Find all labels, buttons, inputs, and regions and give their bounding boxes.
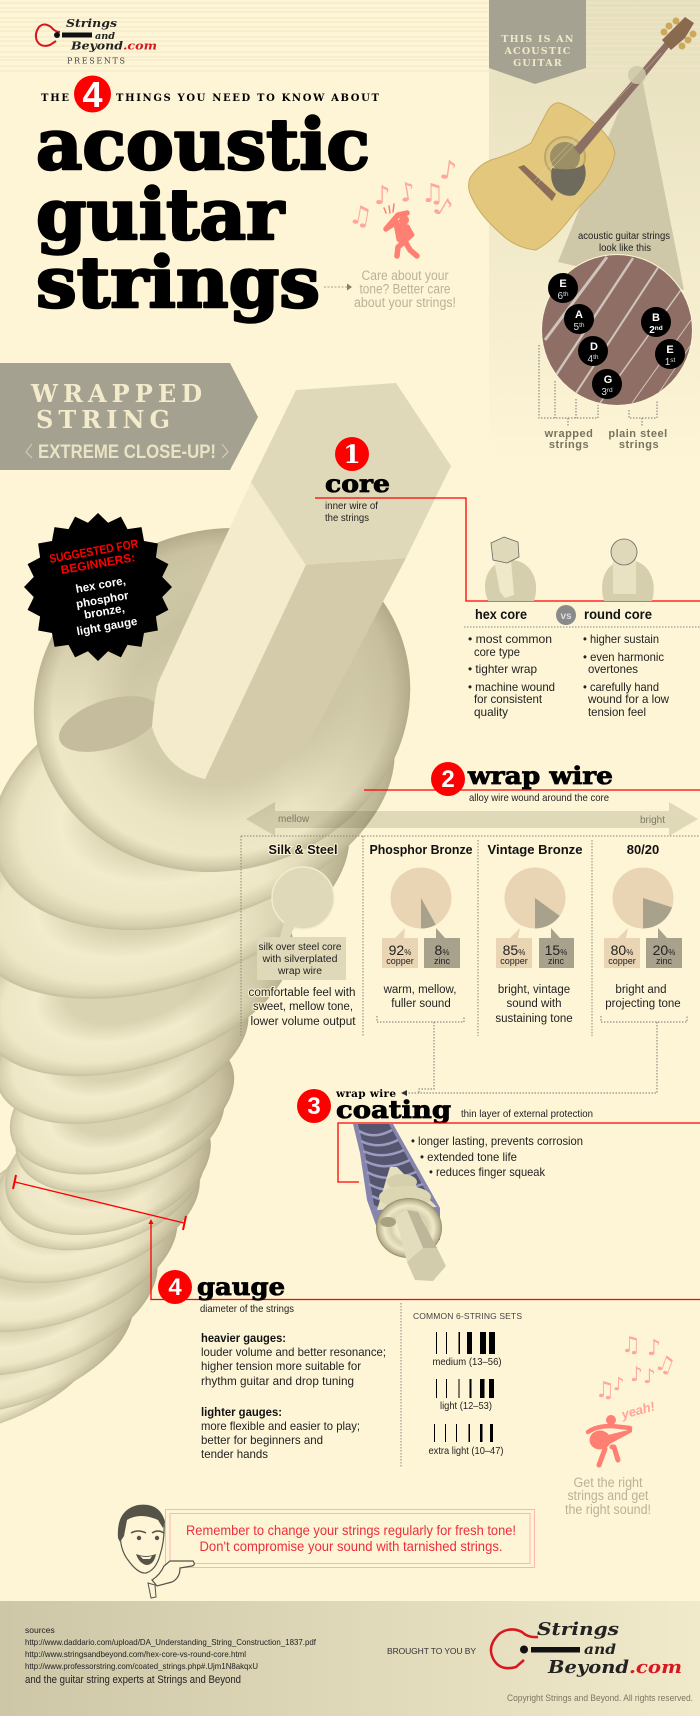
list: coating benefits: • extended tone life [420, 1150, 517, 1164]
subtitle: the 4 things you need to know about: THE [41, 93, 69, 104]
column: phosphor bronze: Phosphor Bronze [370, 842, 472, 857]
list: round core benefits: wound for a low [587, 692, 669, 706]
banner: wrapped string extreme close-up: STRING [36, 405, 170, 434]
comparison header: hex core vs round core: hex core [475, 607, 527, 622]
caption: get the right strings: the right sound! [565, 1502, 651, 1517]
section 3 heading: coating: thin layer of external protection [461, 1108, 593, 1120]
caption: care about your tone: Care about your [362, 268, 449, 283]
close-up circle of guitar strings: E [559, 278, 567, 290]
banner: wrapped string extreme close-up [0, 363, 258, 470]
close-up circle of guitar strings: A [575, 309, 583, 321]
section 2 heading: wrap wire: 2 [441, 766, 455, 793]
footer: sources: sources [25, 1625, 55, 1635]
list: coating benefits: • reduces finger squeak [429, 1165, 546, 1179]
icon: acoustic guitar [469, 17, 696, 250]
chart: common 6-string sets: medium (13–56) [432, 1356, 502, 1368]
label: wrapped strings: strings [549, 439, 589, 451]
icon: music notes around listener: ♫ [346, 200, 375, 233]
icon: music notes around guitarist: ♪ [647, 1336, 661, 1361]
close-up circle of guitar strings: D [590, 341, 598, 353]
footer logo: Strings and Beyond [491, 1619, 682, 1678]
caption: get the right strings: strings and get [568, 1488, 649, 1503]
section 3 heading: coating [297, 1088, 593, 1124]
close-up circle of guitar strings: 6 [558, 291, 563, 302]
title: acoustic guitar strings: guitar [36, 173, 285, 256]
column: phosphor bronze: copper [386, 956, 414, 966]
section 4 heading: gauge: diameter of the strings [200, 1303, 294, 1315]
connectors: wrap wire to coating [377, 1016, 687, 1096]
label: plain steel strings: strings [619, 439, 659, 451]
close-up circle of guitar strings: 3 [601, 387, 607, 398]
icon: music notes around listener: ♪ [397, 177, 418, 209]
column: silk and steel: wrap wire [277, 966, 322, 977]
callout: remember to change your strings: Remember to change your strings regularly for fresh tone! [186, 1522, 516, 1538]
footer logo: Strings and Beyond: Strings [537, 1619, 619, 1640]
column: vintage bronze: bright, vintage [498, 984, 570, 996]
badge: suggested for beginners: light gauge [76, 616, 138, 638]
label: plain steel strings [608, 428, 668, 451]
column: silk and steel: Silk & Steel [268, 842, 338, 857]
caption: care about your tone: tone? Better care [360, 282, 450, 296]
icon: music notes around listener: ♪ [374, 181, 391, 211]
icon: music notes around guitarist: ♫ [621, 1333, 641, 1358]
section 1 heading: core: 1 [343, 440, 361, 469]
close-up circle of guitar strings: nd [655, 325, 663, 332]
banner: this is an acoustic guitar: GUITAR [513, 58, 563, 69]
icon: music notes around listener: ♪ [428, 191, 457, 225]
column: 80/20: 80/20 [627, 842, 659, 857]
title: acoustic guitar strings: strings [36, 241, 320, 324]
list: round core benefits [583, 632, 669, 719]
footer logo: Strings and Beyond: Beyond [547, 1657, 629, 1678]
footer logo: Strings and Beyond: and [584, 1642, 616, 1658]
label: wrapped strings: wrapped [544, 428, 593, 440]
label: plain steel strings: plain steel [608, 428, 668, 440]
column: 80/20: projecting tone [605, 998, 681, 1010]
text: heavier gauges [201, 1331, 386, 1388]
column: vintage bronze: zinc [548, 956, 564, 966]
section 1 heading: core: inner wire of [325, 501, 378, 512]
badge: suggested for beginners: hex core, [75, 575, 127, 596]
label: wrapped strings [544, 428, 593, 451]
section 1 heading: core: core [325, 469, 390, 498]
illustration: round core [602, 539, 654, 601]
caption: get the right strings [565, 1475, 651, 1517]
text: heavier gauges: heavier gauges: [201, 1331, 286, 1345]
brackets: wrapped and plain strings [539, 345, 657, 426]
column: phosphor bronze [370, 842, 472, 1010]
list: coating benefits: • longer lasting, prevents corrosion [411, 1134, 583, 1148]
column: vintage bronze: sustaining tone [495, 1013, 573, 1025]
arrow: to caption [324, 284, 352, 290]
footer: sources: and the guitar string experts at Strings and Beyond [25, 1674, 241, 1686]
banner: this is an acoustic guitar: THIS IS AN [501, 34, 575, 45]
caption: get the right strings: Get the right [574, 1475, 643, 1490]
section 4 heading: gauge: gauge [197, 1272, 285, 1301]
close-up circle of guitar strings: th [579, 322, 585, 329]
badge: suggested for beginners: SUGGESTED FOR [48, 536, 140, 566]
icon: guitarist saying yeah [588, 1398, 657, 1465]
footer: sources [25, 1625, 317, 1686]
column: silk and steel: comfortable feel with [248, 987, 356, 999]
column: vintage bronze: copper [500, 956, 528, 966]
title: acoustic guitar strings [36, 103, 370, 324]
section 1 heading: core: the strings [325, 513, 369, 524]
subtitle: the 4 things you need to know about: 4 [82, 74, 103, 115]
list: coating benefits [411, 1134, 583, 1179]
text: lighter gauges: better for beginners and [201, 1433, 323, 1447]
icon: music notes around guitarist: ♫ [651, 1350, 678, 1380]
column: 80/20: 20% [653, 942, 675, 958]
list: hex core benefits: • most common [468, 632, 552, 646]
section 3 heading: coating: 3 [307, 1093, 321, 1120]
footer band [0, 1601, 700, 1716]
column: vintage bronze [488, 842, 582, 1025]
subtitle: the 4 things you need to know about: THINGS YOU NEED TO KNOW ABOUT [116, 93, 380, 104]
list: hex core benefits: core type [474, 645, 520, 659]
badge: suggested for beginners: BEGINNERS: [60, 550, 136, 577]
chart: common 6-string sets [413, 1311, 522, 1457]
close-up circle of guitar strings: acoustic guitar strings [578, 230, 670, 242]
section 3 heading: coating: wrap wire [335, 1088, 396, 1100]
close-up circle of guitar strings: 5 [574, 322, 579, 333]
callout: remember to change your strings: Don't compromise your sound with tarnished strings. [200, 1538, 502, 1554]
close-up circle of guitar strings: rd [607, 387, 613, 394]
column: silk and steel: silk over steel core [258, 942, 342, 953]
badge: suggested for beginners [24, 513, 172, 661]
text: lighter gauges: lighter gauges: [201, 1405, 282, 1419]
icon: music notes around guitarist: ♪ [613, 1374, 624, 1395]
badge: suggested for beginners: phosphor [75, 590, 130, 611]
section 4 heading: gauge [148, 1219, 700, 1315]
logo: Strings and Beyond: PRESENTS [67, 56, 125, 66]
column: phosphor bronze: zinc [434, 956, 450, 966]
column: vintage bronze: 85% [503, 942, 525, 958]
text: heavier gauges: higher tension more suitable for [201, 1359, 361, 1373]
banner: this is an acoustic guitar: ACOUSTIC [503, 46, 572, 57]
list: round core benefits: • even harmonic [583, 650, 664, 664]
close-up circle of guitar strings: th [563, 291, 569, 298]
close-up circle of guitar strings: 2 [649, 325, 655, 336]
chart: common 6-string sets: light (12–53) [440, 1400, 492, 1412]
icon: person holding head [384, 204, 417, 256]
close-up circle of guitar strings: E [666, 344, 674, 356]
list: round core benefits: • carefully hand [583, 680, 659, 694]
chart: common 6-string sets: extra light (10–47) [428, 1445, 504, 1457]
close-up circle of guitar strings [541, 230, 694, 406]
list: round core benefits: tension feel [588, 705, 646, 719]
icon: guitarist saying yeah: yeah! [619, 1398, 657, 1422]
wound string coils [0, 480, 455, 1466]
icon: music notes around listener [346, 155, 458, 233]
list: round core benefits: • higher sustain [583, 632, 659, 646]
column: phosphor bronze: 92% [389, 942, 411, 958]
column: silk and steel [248, 842, 356, 1028]
column: phosphor bronze: 8% [435, 942, 449, 958]
section 1 heading: core [325, 437, 390, 524]
column: silk and steel: with silverplated [261, 954, 338, 965]
title: acoustic guitar strings: acoustic [36, 103, 370, 186]
section 2 heading: wrap wire: alloy wire wound around the core [469, 792, 609, 804]
column: vintage bronze: 15% [545, 942, 567, 958]
subtitle: the 4 things you need to know about [41, 74, 380, 115]
caption: care about your tone: about your strings! [354, 295, 456, 310]
illustration: hex core [485, 537, 536, 601]
column: silk and steel: sweet, mellow tone, [253, 1001, 353, 1013]
logo: Strings and Beyond: .com [123, 38, 157, 52]
badge: suggested for beginners: bronze, [83, 603, 126, 622]
footer: sources: http://www.daddario.com/upload/DA_Understanding_String_Construction_1837.pdf [25, 1637, 317, 1647]
column: phosphor bronze: warm, mellow, [383, 984, 456, 996]
icon: music notes around guitarist [595, 1333, 678, 1403]
close-up circle of guitar strings: 1 [665, 357, 670, 368]
arrow: mellow to bright scale [246, 802, 698, 836]
arrow: mellow to bright scale: mellow [278, 814, 310, 825]
section 3 heading: coating: coating [336, 1095, 451, 1124]
chart: common 6-string sets: COMMON 6-STRING SETS [413, 1311, 522, 1321]
banner: this is an acoustic guitar [489, 0, 586, 84]
text: lighter gauges: tender hands [201, 1447, 268, 1461]
logo: Strings and Beyond: and [95, 31, 115, 42]
column: silk and steel: lower volume output [250, 1016, 356, 1028]
footer: sources: http://www.professorstring.com/coated_strings.php#.Ujm1N8akqxU [25, 1661, 258, 1671]
column: 80/20: bright and [615, 984, 667, 996]
banner: wrapped string extreme close-up: EXTREME CLOSE-UP! [38, 442, 216, 463]
icon: retro man pointing [118, 1505, 194, 1598]
caption: care about your tone [354, 268, 456, 310]
icon: music notes around guitarist: ♪ [643, 1364, 656, 1388]
logo: Strings and Beyond [36, 16, 157, 66]
text: heavier gauges: rhythm guitar and drop tuning [201, 1374, 354, 1388]
section 2 heading: wrap wire [364, 761, 700, 804]
list: hex core benefits: • machine wound [468, 680, 555, 694]
section 4 heading: gauge: 4 [168, 1274, 182, 1301]
spotlight beam from guitar to close-up [558, 78, 684, 290]
close-up circle of guitar strings: 4 [588, 354, 593, 365]
text: heavier gauges: louder volume and better resonance; [201, 1345, 386, 1359]
close-up circle of guitar strings: look like this [599, 242, 651, 254]
close-up circle of guitar strings: B [652, 312, 660, 324]
callout: remember to change your strings [166, 1510, 534, 1568]
illustration: coated string [353, 1124, 446, 1281]
arrow: mellow to bright scale: bright [640, 815, 665, 826]
icon: music notes around guitarist: ♫ [595, 1378, 615, 1403]
list: hex core benefits [468, 632, 555, 719]
column: 80/20: zinc [656, 956, 672, 966]
logo: Strings and Beyond: Beyond [70, 38, 123, 52]
close-up circle of guitar strings: th [593, 354, 599, 361]
close-up circle of guitar strings: G [604, 374, 612, 386]
list: hex core benefits: for consistent [474, 692, 543, 706]
icon: music notes around listener: ♪ [438, 155, 458, 187]
list: round core benefits: overtones [588, 662, 638, 676]
column: phosphor bronze: fuller sound [391, 998, 451, 1010]
comparison header: hex core vs round core: vs [560, 611, 572, 622]
logo: Strings and Beyond: Strings [66, 16, 118, 30]
close-up circle of guitar strings: st [670, 357, 676, 364]
section 2 heading: wrap wire: wrap wire [467, 761, 613, 790]
icon: music notes around listener: ♫ [421, 179, 444, 209]
list: hex core benefits: quality [474, 705, 508, 719]
column: vintage bronze: Vintage Bronze [488, 842, 582, 857]
column: 80/20 [604, 842, 682, 1010]
banner: wrapped string extreme close-up: WRAPPED [30, 379, 202, 408]
comparison header: hex core vs round core: round core [584, 607, 652, 622]
column: 80/20: 80% [611, 942, 633, 958]
list: hex core benefits: • tighter wrap [468, 662, 537, 676]
footer logo: Strings and Beyond: .com [629, 1657, 682, 1678]
text: lighter gauges [201, 1405, 360, 1461]
footer: sources: http://www.stringsandbeyond.com/hex-core-vs-round-core.html [25, 1649, 246, 1659]
hexagonal core of the string [152, 383, 451, 779]
column: 80/20: copper [608, 956, 636, 966]
measure line: gauge diameter [13, 1175, 186, 1230]
icon: music notes around guitarist: ♪ [630, 1362, 643, 1386]
text: lighter gauges: more flexible and easier to play; [201, 1419, 360, 1433]
label: brought to you by: BROUGHT TO YOU BY [387, 1646, 476, 1656]
column: vintage bronze: sound with [507, 998, 561, 1010]
comparison header: hex core vs round core [475, 605, 652, 625]
